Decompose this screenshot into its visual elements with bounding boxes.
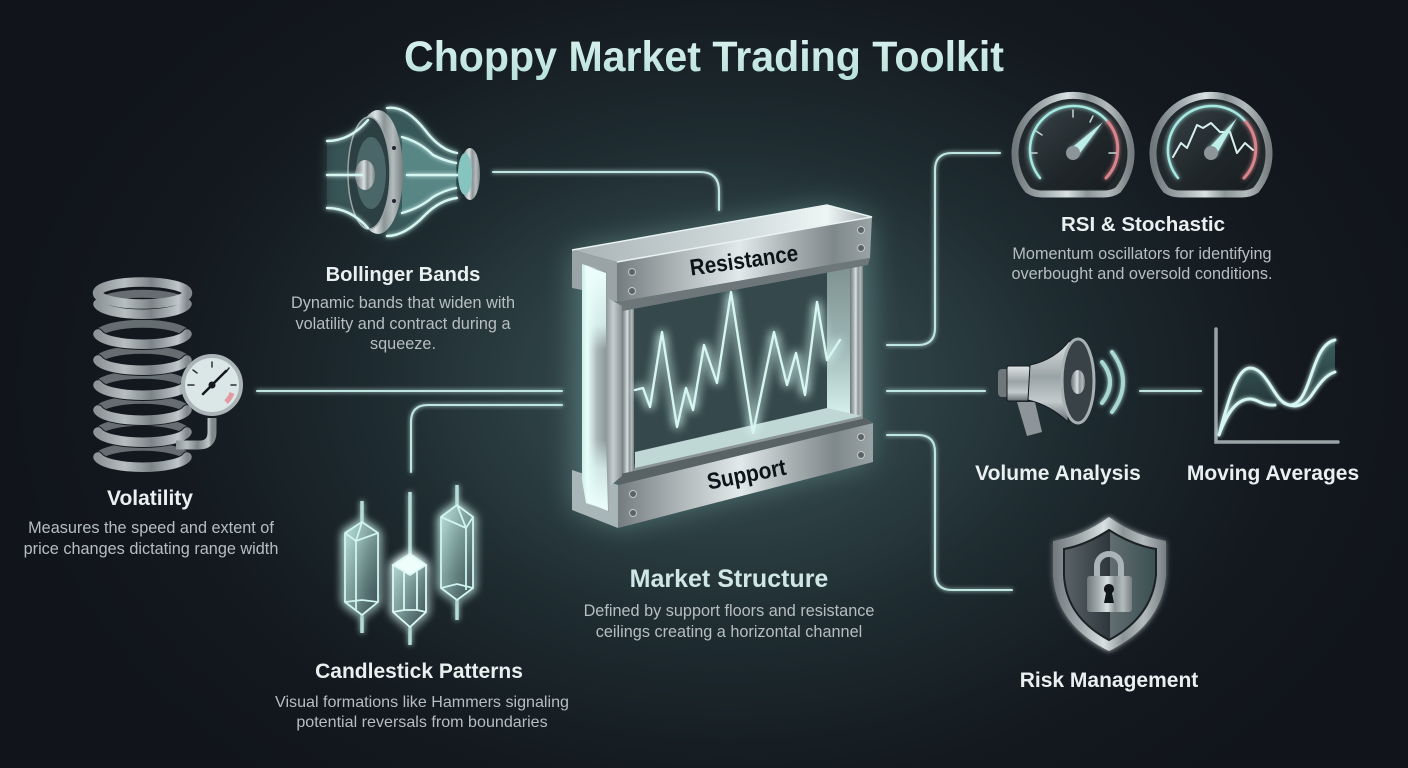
heading: candlestick patterns: Candlestick Patterns [315,660,523,683]
icon: moving averages chart [1216,329,1338,442]
bottom shelf [635,408,862,470]
heading: RSI and stochastic: RSI & Stochastic [1061,213,1225,236]
candle 1 [345,522,378,615]
small ring [460,148,480,200]
heading: volatility: Volatility [107,487,193,510]
heading: bollinger bands: Bollinger Bands [326,264,480,286]
text: volatility description: Measures the speed and extent of [28,519,274,537]
icon: volatility spring and gauge [98,282,241,467]
text: bollinger bands description: squeeze. [370,335,436,353]
candle 3 [441,505,473,600]
window interior [633,262,827,465]
icon: RSI gauge [1015,95,1131,194]
price wave [635,292,840,433]
spring coils, front [98,304,187,467]
left glass column [582,264,622,512]
frame glow [572,205,872,528]
panel: market structure frame [572,205,873,528]
text: market structure description: ceilings creating a horizontal channel [596,623,862,641]
label: support: Support [705,454,789,495]
label: resistance: Resistance [688,240,800,281]
icon: bollinger bands [327,108,480,236]
candle 2 [393,554,426,627]
text: bollinger bands description: volatility and contract during a [296,315,511,333]
support beam [572,418,873,528]
heading: moving averages: Moving Averages [1187,462,1359,485]
text: RSI description: overbought and oversold conditions. [1011,265,1273,283]
resistance beam [572,205,872,312]
heading: market structure: Market Structure [630,565,828,593]
heading: volume analysis: Volume Analysis [975,462,1141,485]
icon: risk management shield [1053,517,1166,651]
icon: megaphone [998,339,1123,436]
pipe [176,418,212,445]
text: candlestick description: potential reversals from boundaries [296,713,548,731]
text: RSI description: Momentum oscillators for identifying [1012,245,1272,263]
text: volatility description: price changes dictating range width [24,540,278,558]
text: bollinger bands description: Dynamic bands that widen with [291,294,515,312]
connector lines [257,153,1201,590]
outer ring [353,110,403,234]
gauge [183,356,241,414]
text: market structure description: Defined by support floors and resistance [584,602,874,620]
spring coils, back [98,294,187,457]
icon: stochastic gauge [1153,95,1269,194]
heading: risk management: Risk Management [1020,669,1198,692]
title: Choppy Market Trading Toolkit [404,33,1004,81]
right column [827,262,863,420]
text: candlestick description: Visual formations like Hammers signaling [275,693,569,711]
icon: candlestick crystals [345,485,473,645]
left inner column [622,308,634,474]
